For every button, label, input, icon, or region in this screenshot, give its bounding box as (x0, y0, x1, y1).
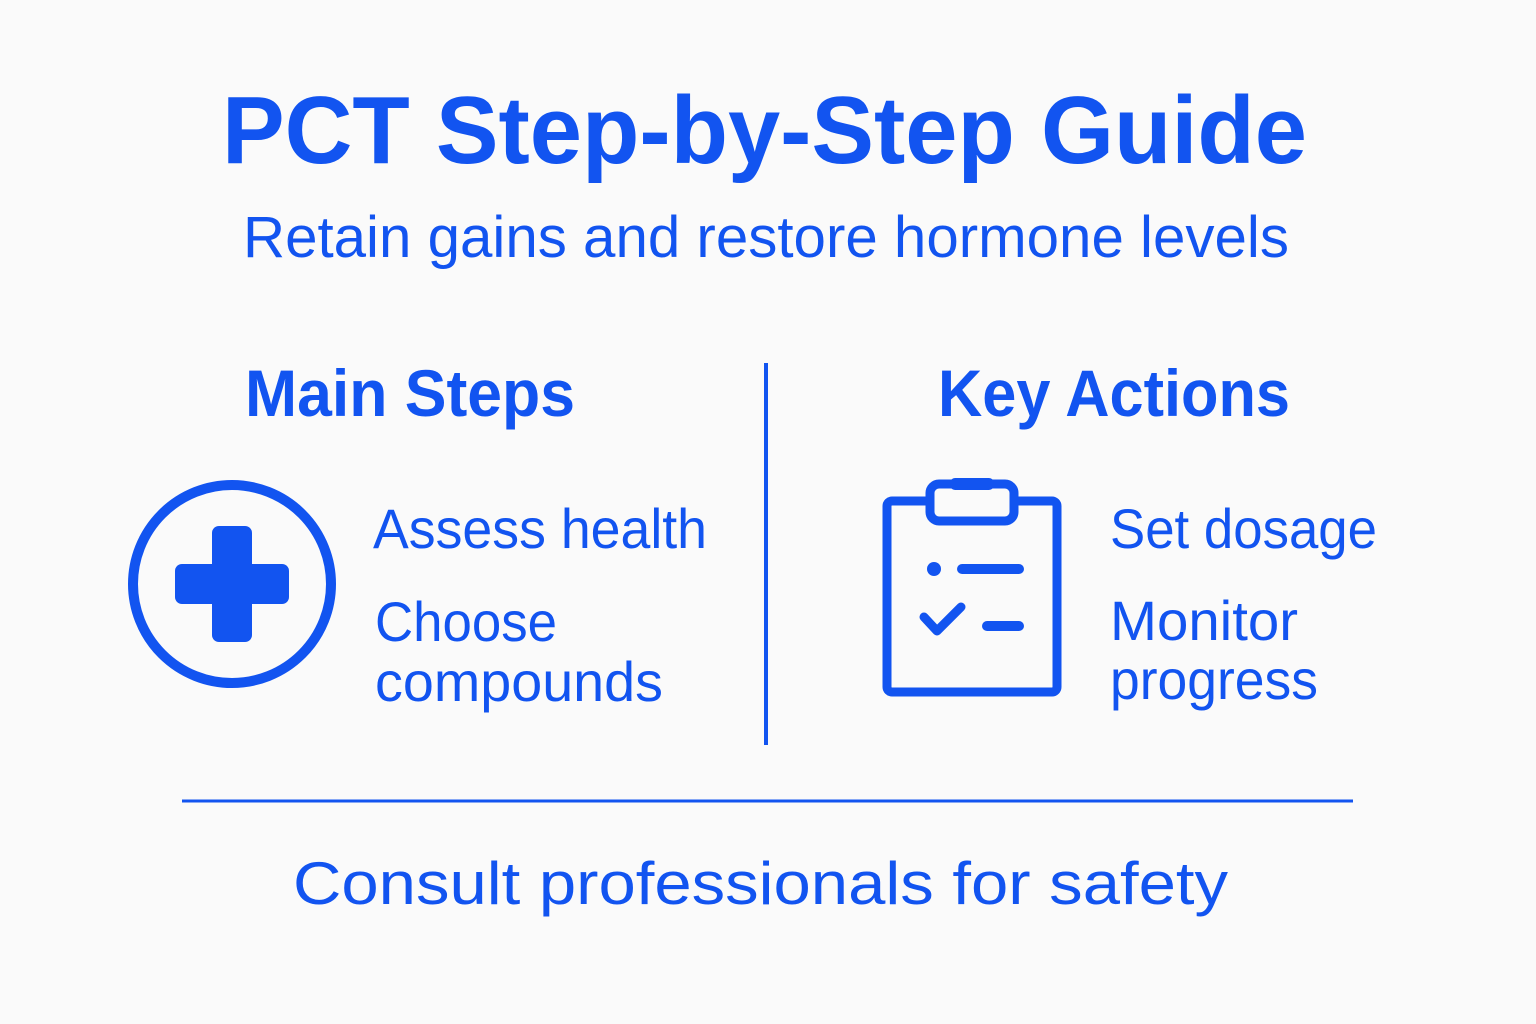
icon: medical cross (133, 485, 331, 683)
text block: key actions: Set dosage (1110, 497, 1377, 560)
title: PCT Step-by-Step Guide (222, 77, 1307, 184)
subtitle: Retain gains and restore hormone levels (243, 205, 1289, 270)
horizontal divider (182, 800, 1353, 802)
text block: key actions (1110, 497, 1377, 711)
text block: main steps: Assess health (373, 497, 707, 560)
text block: key actions: progress (1110, 648, 1318, 711)
icon: clipboard (887, 478, 1057, 692)
text block: main steps: Choose (375, 590, 557, 653)
text block: main steps (373, 497, 707, 713)
text block: key actions: Monitor (1110, 589, 1298, 652)
vertical divider (764, 363, 768, 745)
footer note: Consult professionals for safety (293, 850, 1228, 917)
heading: Main Steps: Main Steps (245, 356, 575, 430)
heading: Key Actions: Key Actions (938, 356, 1290, 430)
text block: main steps: compounds (375, 650, 663, 713)
